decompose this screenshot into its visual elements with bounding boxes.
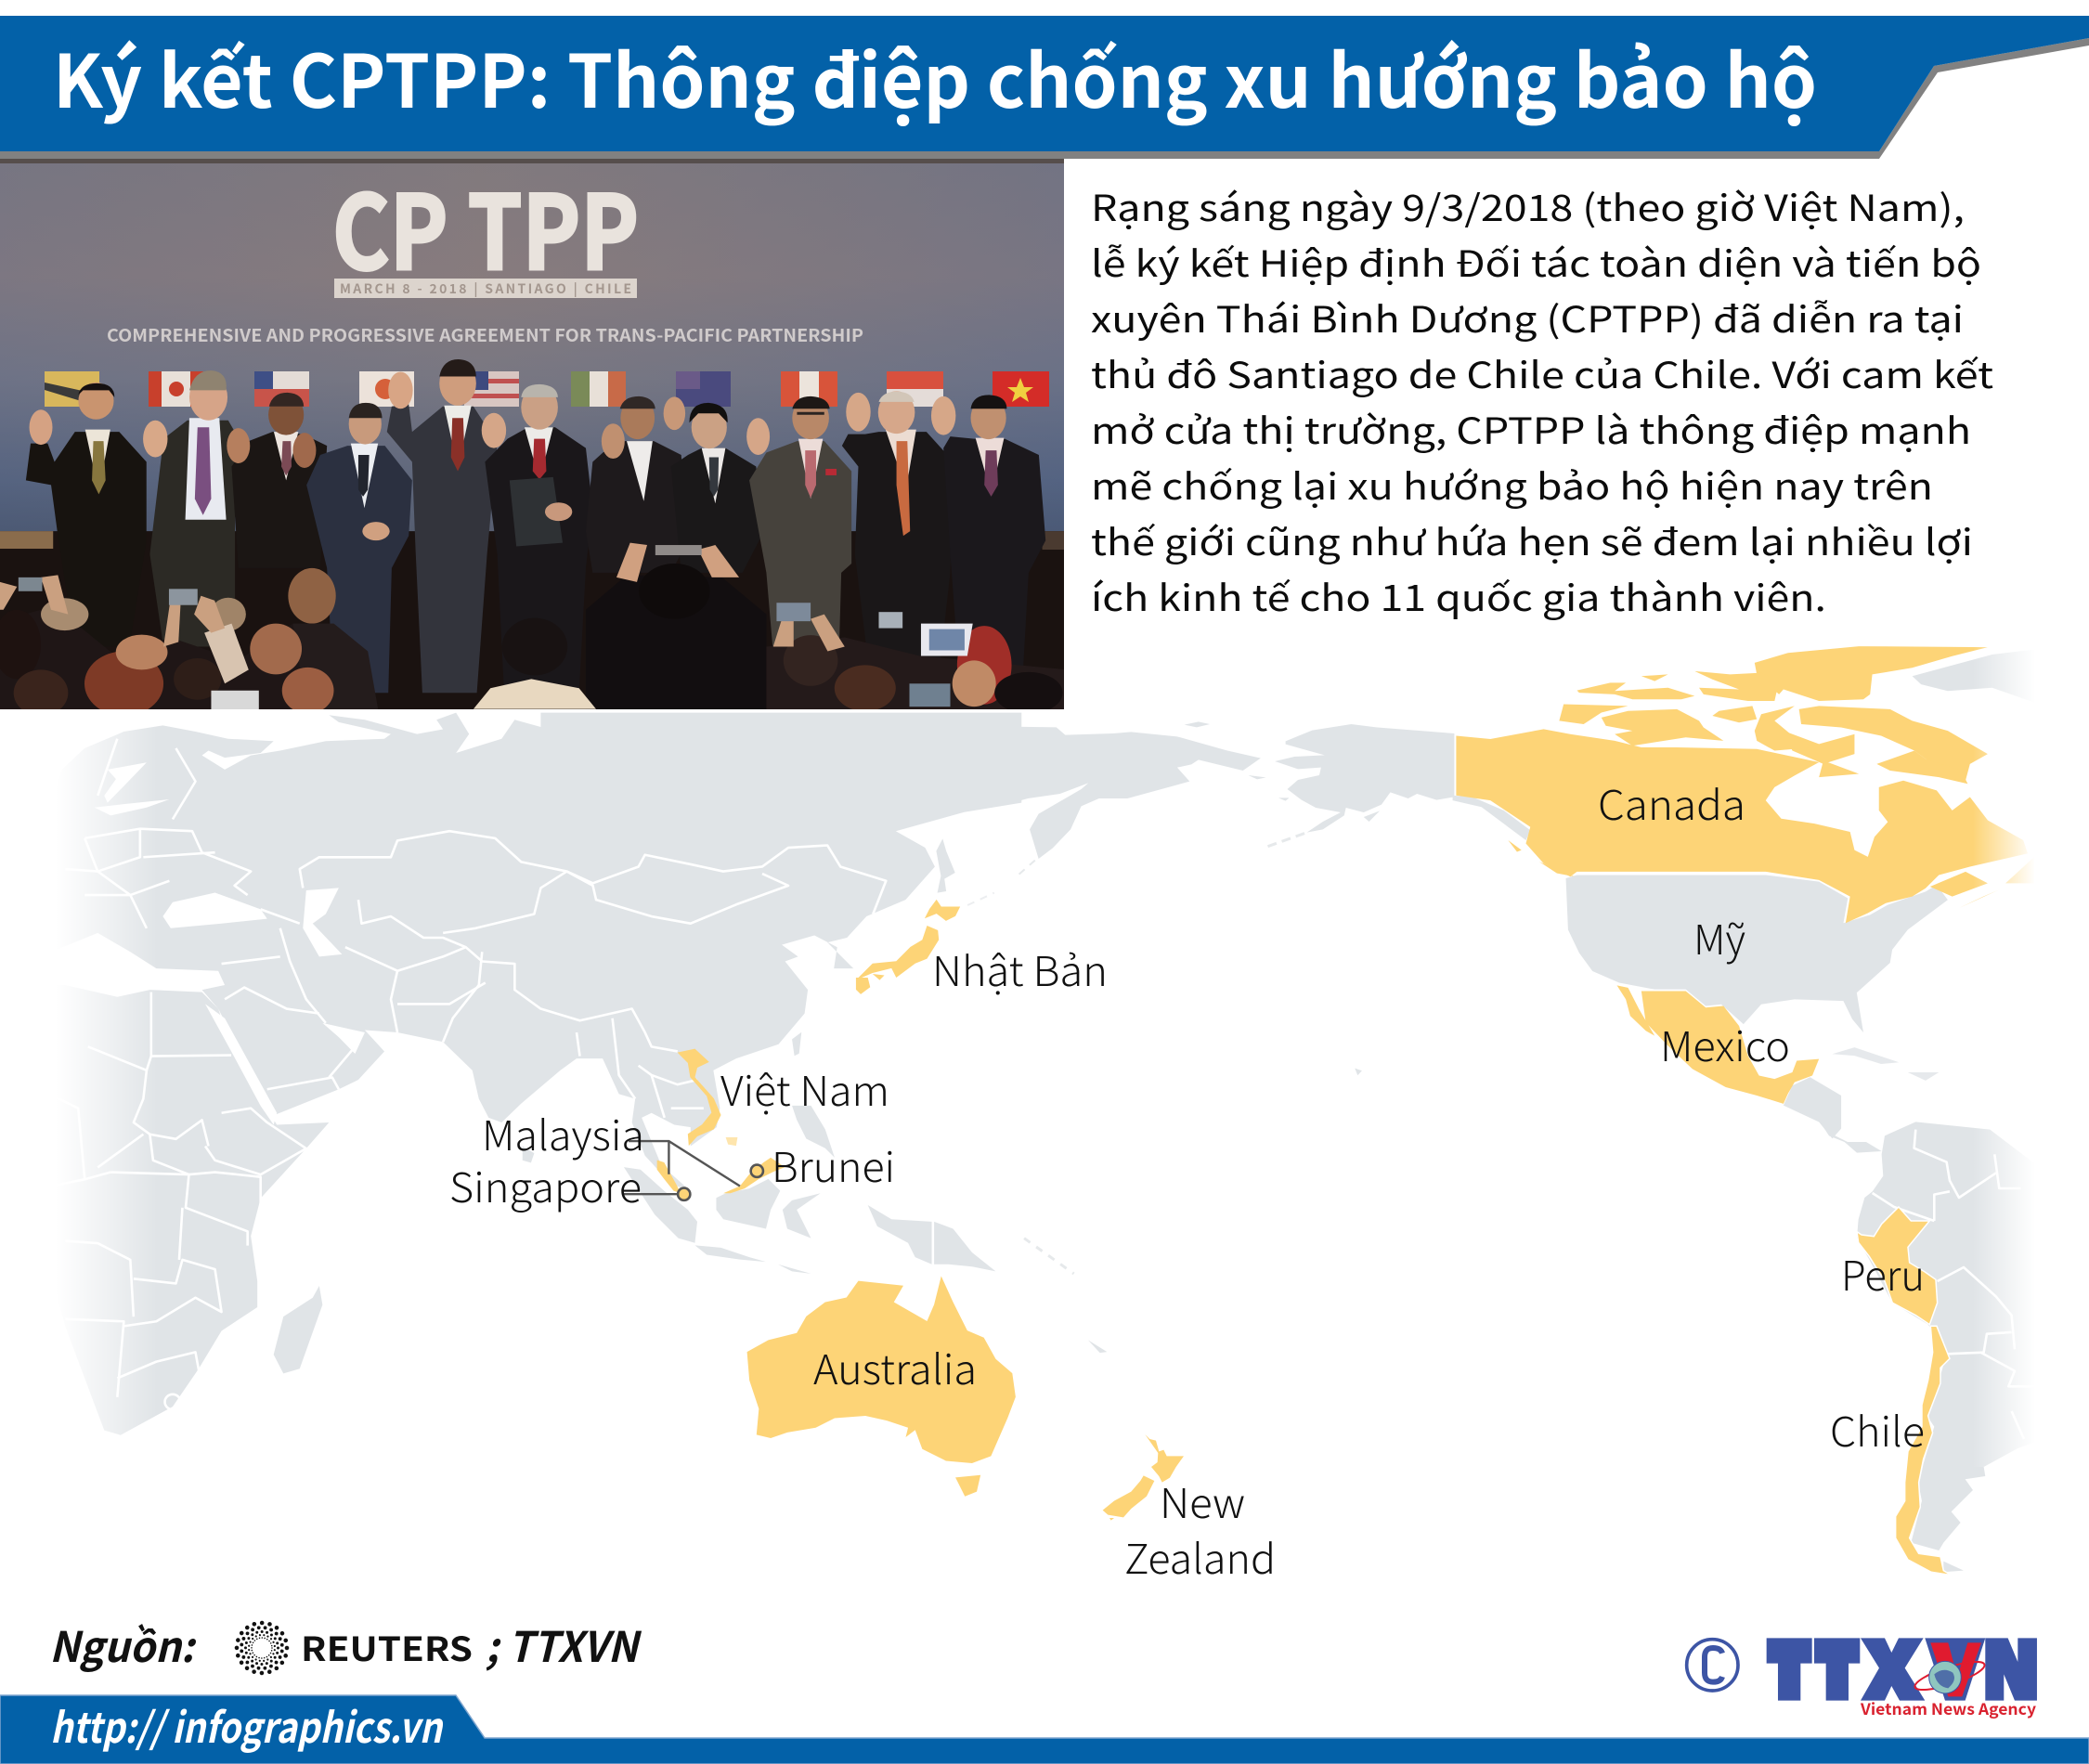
- label: New Zealand: Zealand: [1124, 1526, 1276, 1586]
- map: Japan highlighted: [856, 900, 960, 994]
- map: New Zealand highlighted: [1103, 1434, 1184, 1521]
- logo letter N: [1985, 1638, 2037, 1701]
- map: Chile highlighted: [1896, 1326, 1952, 1576]
- website url: http:// infographics.vn: [50, 1694, 445, 1755]
- label: Việt Nam: Việt Nam: [720, 1058, 889, 1118]
- label: New Zealand: [1124, 1471, 1276, 1586]
- photo: audience with raised phones: [0, 543, 1068, 725]
- label: Chile: Chile: [1830, 1399, 1925, 1459]
- delegate 10: [841, 391, 956, 537]
- photo: eleven delegates: [26, 359, 1045, 693]
- world map: [0, 631, 2089, 1576]
- map: Mexico highlighted: [1617, 985, 1819, 1104]
- intro paragraph: thủ đô Santiago de Chile của Chile. Với cam kết: [1091, 347, 1993, 399]
- delegate 8: [671, 403, 770, 573]
- title banner: [0, 16, 2089, 159]
- delegate 6 with document folder: [482, 384, 592, 693]
- intro paragraph: lễ ký kết Hiệp định Đối tác toàn diện và tiến bộ: [1091, 236, 1981, 288]
- photo: stage and audience area: [0, 359, 1068, 725]
- map: Canada highlighted: [1456, 646, 2034, 923]
- intro paragraph: Rạng sáng ngày 9/3/2018 (theo giờ Việt Nam),: [1091, 180, 1965, 232]
- footer bar: [0, 1694, 2089, 1764]
- title text: Ký kết CPTPP: Thông điệp chống xu hướng bảo hộ: [53, 22, 1817, 129]
- photo: row of member flags: [45, 371, 1049, 407]
- label: Mexico: Mexico: [1660, 1014, 1790, 1073]
- delegate 7: [586, 396, 688, 573]
- label: Nhật Bản: Nhật Bản: [932, 939, 1108, 998]
- intro paragraph: ích kinh tế cho 11 quốc gia thành viên.: [1091, 570, 1826, 622]
- map: North America: [1453, 646, 2034, 1138]
- intro paragraph: mở cửa thị trường, CPTPP là thông điệp mạnh: [1091, 403, 1971, 455]
- logo caption: Vietnam News Agency: [1860, 1696, 2036, 1719]
- map: Vietnam highlighted: [678, 1049, 737, 1146]
- label: Peru: Peru: [1841, 1243, 1925, 1303]
- delegate 5: [387, 359, 498, 693]
- delegate 9: [749, 396, 852, 646]
- map: Eurasia and Africa: [39, 713, 1021, 1435]
- label: Canada: Canada: [1598, 772, 1745, 832]
- label: New Zealand: New: [1160, 1471, 1245, 1530]
- intro paragraph: thế giới cũng như hứa hẹn sẽ đem lại nhiều lợi: [1091, 514, 1973, 566]
- map: Peru highlighted: [1857, 1207, 1938, 1325]
- photo: CPTPP signing ceremony: [0, 150, 1068, 725]
- TTXVN source: ; TTXVN: [486, 1614, 642, 1674]
- icon: Reuters dotted logo: [237, 1623, 287, 1673]
- map edge fades: [0, 631, 2089, 1467]
- intro paragraph: mẽ chống lại xu hướng bảo hộ hiện nay trên: [1091, 459, 1933, 511]
- photo: date banner: MARCH 8 - 2018 | SANTIAGO | CHILE: [340, 279, 631, 298]
- intro paragraph: [1091, 180, 1993, 622]
- copyright and TTXVN logo: [1687, 1638, 2037, 1701]
- logo letter V: [1925, 1638, 1985, 1701]
- map: South America: [1815, 1114, 2035, 1576]
- leader lines and markers: [624, 1141, 763, 1200]
- map: Malaysia and Brunei highlighted: [657, 1158, 785, 1193]
- source label: Nguồn:: [49, 1614, 197, 1674]
- photo: backdrop logo CP TPP: CP TPP: [332, 150, 639, 299]
- map country labels: [449, 772, 1925, 1586]
- label: Malaysia: Malaysia: [482, 1103, 644, 1162]
- Reuters wordmark: REUTERS: [301, 1623, 473, 1671]
- label: Mỹ: Mỹ: [1693, 907, 1745, 966]
- source line: [49, 1614, 642, 1674]
- photo backdrop: [0, 154, 1064, 563]
- delegate 11: [943, 395, 1045, 693]
- map: Russian far east, Alaska, Sakhalin and North Pacific islands: [876, 713, 1454, 1075]
- delegate 4: [306, 403, 412, 693]
- map: Australia highlighted: [747, 1276, 1016, 1497]
- icon: copyright symbol: [1687, 1640, 1738, 1691]
- delegate 2: [143, 370, 236, 646]
- logo letters TTX: [1767, 1638, 1925, 1701]
- intro paragraph: xuyên Thái Bình Dương (CPTPP) đã diễn ra tại: [1091, 292, 1964, 344]
- map: East and Southeast Asia, Oceania: [624, 900, 1107, 1497]
- photo: backdrop subtitle: COMPREHENSIVE AND PROGRESSIVE AGREEMENT FOR TRANS-PACIFIC PARTNERSHIP: [107, 322, 863, 347]
- label: Brunei: Brunei: [772, 1135, 895, 1194]
- label: Singapore: Singapore: [449, 1155, 642, 1214]
- label: Australia: Australia: [813, 1337, 977, 1396]
- delegate 1: [26, 383, 147, 531]
- delegate 3: [227, 392, 327, 531]
- logo globe and orbit: [1913, 1656, 1987, 1695]
